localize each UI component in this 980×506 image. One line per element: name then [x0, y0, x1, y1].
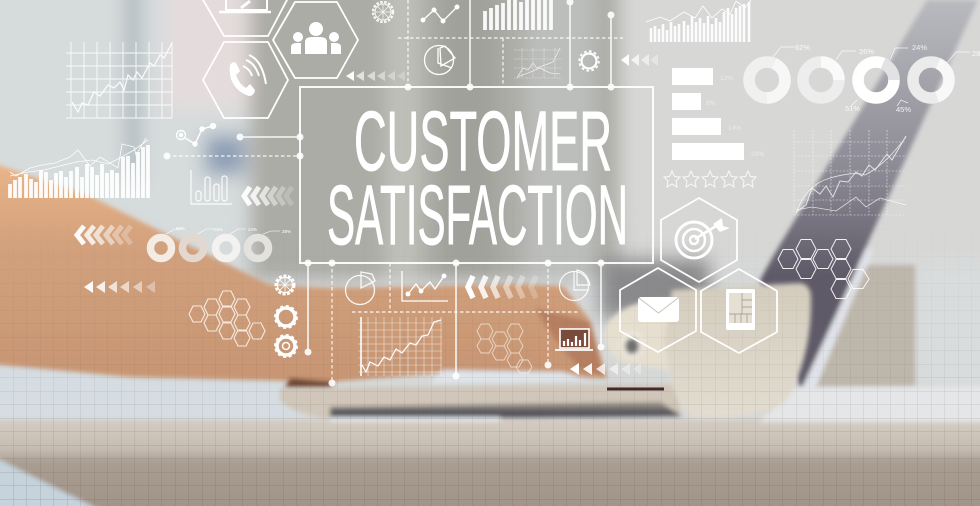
title: customer satisfaction: SATISFACTION	[327, 168, 628, 262]
main frame	[300, 87, 653, 263]
icon: laptop with bars	[555, 329, 593, 350]
small donut charts: 28%	[282, 229, 291, 234]
horizontal bars with percentages	[672, 68, 764, 160]
title: customer satisfaction	[327, 94, 628, 262]
coffee cup	[605, 283, 811, 418]
line chart, right	[794, 130, 906, 215]
laptop base	[280, 384, 682, 421]
hexagon cluster, right	[778, 240, 869, 298]
donut charts with percentages: 62%	[795, 43, 810, 52]
triangle arrows, left lower	[84, 281, 155, 293]
triangle arrows, right of frame	[621, 54, 658, 66]
icon: tablet hexagon	[701, 269, 777, 353]
hexagon cluster, left	[189, 291, 265, 346]
orange arm and hand	[0, 162, 607, 388]
title: customer satisfaction: CUSTOMER	[354, 94, 612, 188]
chevrons, on hand	[468, 276, 536, 298]
icon: line graph, lower	[402, 271, 448, 301]
icon: gears, left	[275, 276, 297, 357]
icon: people hexagon	[273, 2, 358, 78]
chevrons, left lower	[77, 226, 131, 244]
icon: outlined bars	[191, 170, 232, 204]
icon: target hexagon	[661, 198, 737, 282]
icon: envelope hexagon	[620, 268, 696, 352]
hexagon cluster, on hand	[477, 324, 532, 373]
connector lines and nodes	[164, 0, 623, 386]
mini grid line chart, top centre	[514, 48, 562, 78]
chevrons, left middle	[244, 187, 292, 205]
icon: pie chart, lower left	[346, 272, 375, 304]
donut charts with percentages: 45%	[896, 105, 911, 114]
horizontal bars with percentages: 12%	[720, 75, 733, 82]
donut charts with percentages: 26%	[859, 47, 874, 56]
donut charts with percentages: 51%	[845, 104, 860, 113]
icon: small line graph, top	[421, 5, 459, 23]
table	[0, 386, 980, 506]
triangle arrows, under people hexagon	[346, 71, 405, 81]
laptop slot	[607, 388, 664, 390]
donut charts with percentages	[749, 43, 980, 114]
icon: pie chart, top	[424, 46, 455, 74]
small donut charts	[150, 226, 291, 258]
icon: gear, top	[373, 2, 393, 22]
bar chart, top centre	[485, 0, 551, 30]
grid line chart, lower	[358, 317, 442, 376]
laptop screen	[760, 0, 978, 392]
grid overlay	[0, 270, 980, 506]
small line icon with target dot	[176, 124, 216, 146]
triangle arrows, on hand lower	[570, 363, 641, 375]
small donut charts: 62%	[176, 226, 185, 231]
icon: pie chart, lower right	[560, 270, 590, 300]
bar and line chart, left	[10, 138, 148, 198]
donut charts with percentages: 24%	[912, 43, 927, 52]
horizontal bars with percentages: 8%	[706, 100, 716, 107]
icon: gear, top right of frame	[579, 51, 599, 71]
small donut charts: 24%	[248, 227, 257, 232]
horizontal bars with percentages: 20%	[751, 151, 764, 158]
icon: phone hexagon	[203, 42, 288, 118]
star rating	[664, 171, 756, 187]
small donut charts: 26%	[214, 227, 223, 232]
bar and line chart, top right	[646, 0, 751, 42]
icon: laptop hexagon	[202, 0, 288, 36]
beige block behind laptop	[815, 265, 915, 387]
horizontal bars with percentages: 14%	[728, 125, 741, 132]
line chart with grid, upper left	[66, 42, 172, 118]
